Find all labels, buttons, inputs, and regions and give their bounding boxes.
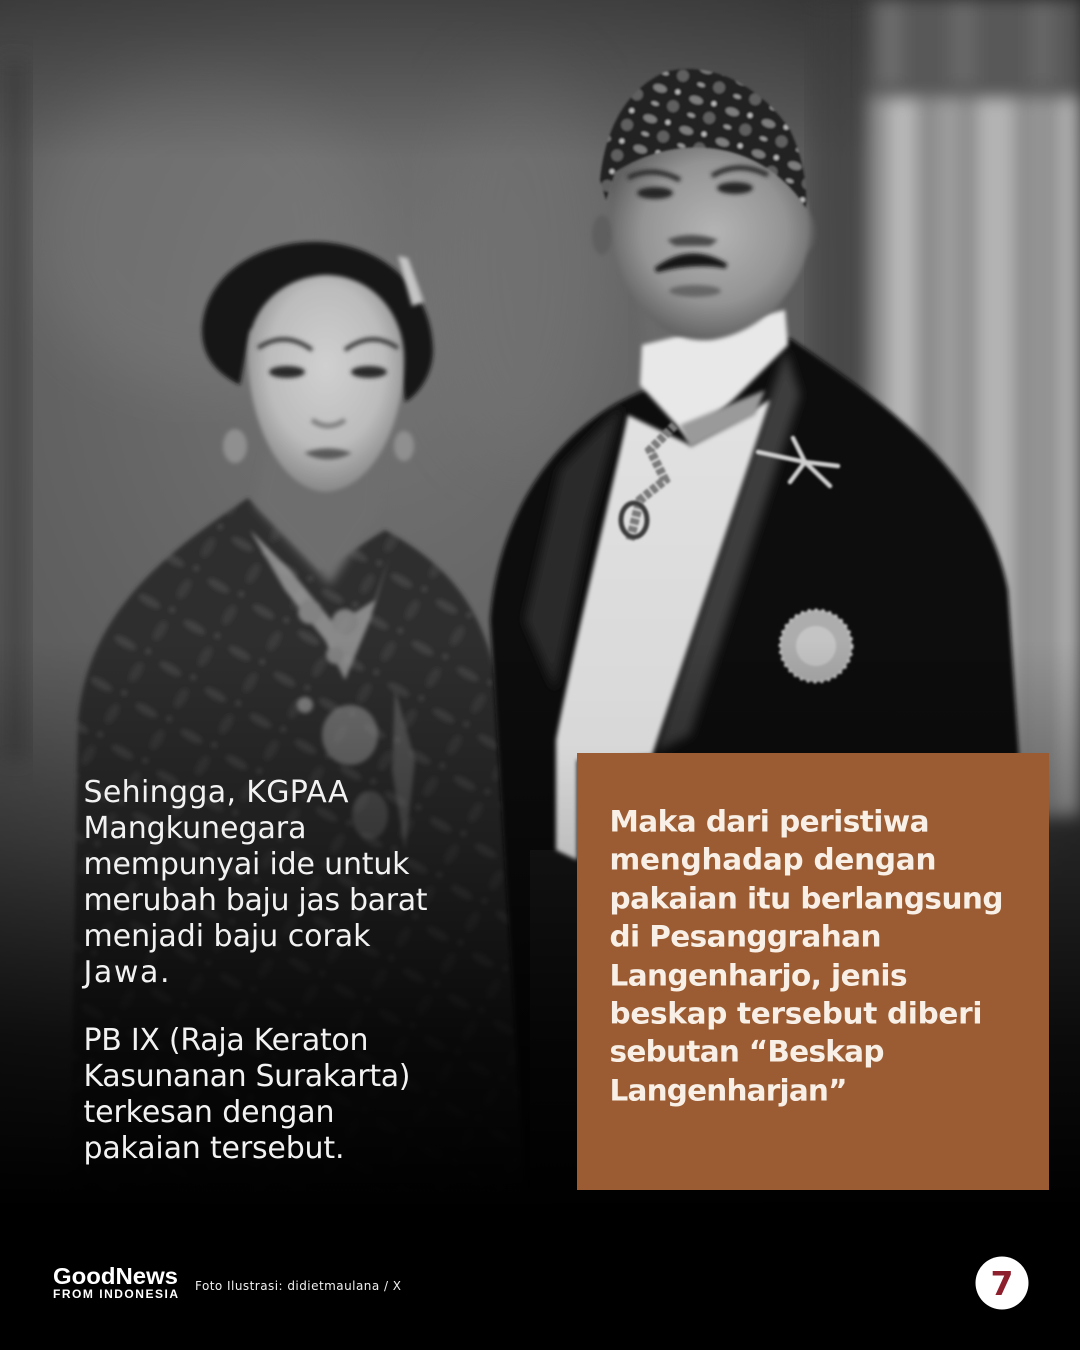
callout text: pakaian itu berlangsung	[610, 882, 1004, 916]
callout text: Langenharjo, jenis	[610, 958, 908, 992]
man: medal	[621, 425, 675, 540]
callout text: beskap tersebut diberi	[610, 996, 982, 1030]
callout text: Langenharjan”	[610, 1074, 848, 1108]
woman: earrings	[223, 429, 414, 463]
man: neck	[640, 280, 780, 350]
man: ears	[592, 212, 815, 255]
logo: GoodNews from Indonesia: FROM INDONESIA	[53, 1287, 178, 1301]
paragraph: Mangkunegara's idea: merubah baju jas barat	[84, 883, 428, 918]
woman: face	[248, 275, 404, 492]
woman	[70, 242, 535, 1190]
man: star brooch	[780, 610, 852, 682]
paragraph: PB IX impressed: PB IX (Raja Keraton	[84, 1023, 368, 1058]
paragraph: Mangkunegara's idea: Sehingga, KGPAA	[84, 775, 349, 810]
callout text: sebutan “Beskap	[610, 1034, 884, 1068]
text block: left paragraphs	[82, 775, 437, 1166]
man: jacket	[490, 338, 1020, 1190]
callout text: di Pesanggrahan	[610, 920, 882, 954]
man: face	[610, 144, 810, 340]
man	[490, 69, 1020, 1190]
page number badge: 7	[991, 1264, 1013, 1303]
paragraph: PB IX impressed: pakaian tersebut.	[84, 1131, 344, 1166]
woman: hair	[202, 242, 433, 402]
panel: Beskap Langenharjan callout	[577, 753, 1049, 1190]
dark bottom fade	[0, 640, 1080, 1210]
paragraph: PB IX impressed: terkesan dengan	[84, 1095, 334, 1130]
paragraph: PB IX impressed: Kasunanan Surakarta)	[84, 1059, 410, 1094]
man: facial features	[628, 168, 768, 297]
callout text: menghadap dengan	[610, 842, 936, 876]
man: jacket lapel	[655, 350, 800, 752]
page number badge	[976, 1256, 1028, 1310]
man: batik cloth	[530, 850, 580, 1190]
woman: hair flower	[398, 256, 424, 306]
woman: neck	[255, 450, 380, 585]
man: left lapel	[525, 405, 622, 690]
woman: kebaya	[70, 498, 535, 1190]
paragraph: Mangkunegara's idea: Jawa.	[82, 955, 170, 990]
man: ribbon	[680, 390, 765, 448]
curtain	[868, 0, 1080, 818]
logo: GoodNews from Indonesia	[53, 1263, 178, 1301]
paragraph: Mangkunegara's idea: Mangkunegara	[84, 811, 306, 846]
photo credit: Foto Ilustrasi: didietmaulana / X	[195, 1279, 401, 1293]
paragraph: Mangkunegara's idea: mempunyai ide untuk	[84, 847, 410, 882]
callout text: Maka dari peristiwa	[610, 804, 930, 838]
logo: GoodNews from Indonesia: GoodNews	[53, 1263, 178, 1289]
paragraph: Mangkunegara's idea: menjadi baju corak	[84, 919, 371, 954]
woman: facial features	[258, 339, 398, 460]
man: headdress	[600, 69, 806, 208]
man: collar	[640, 310, 788, 440]
woman: necklace	[250, 530, 415, 850]
man: lapel pin	[758, 438, 838, 486]
man: shirt	[556, 400, 770, 860]
